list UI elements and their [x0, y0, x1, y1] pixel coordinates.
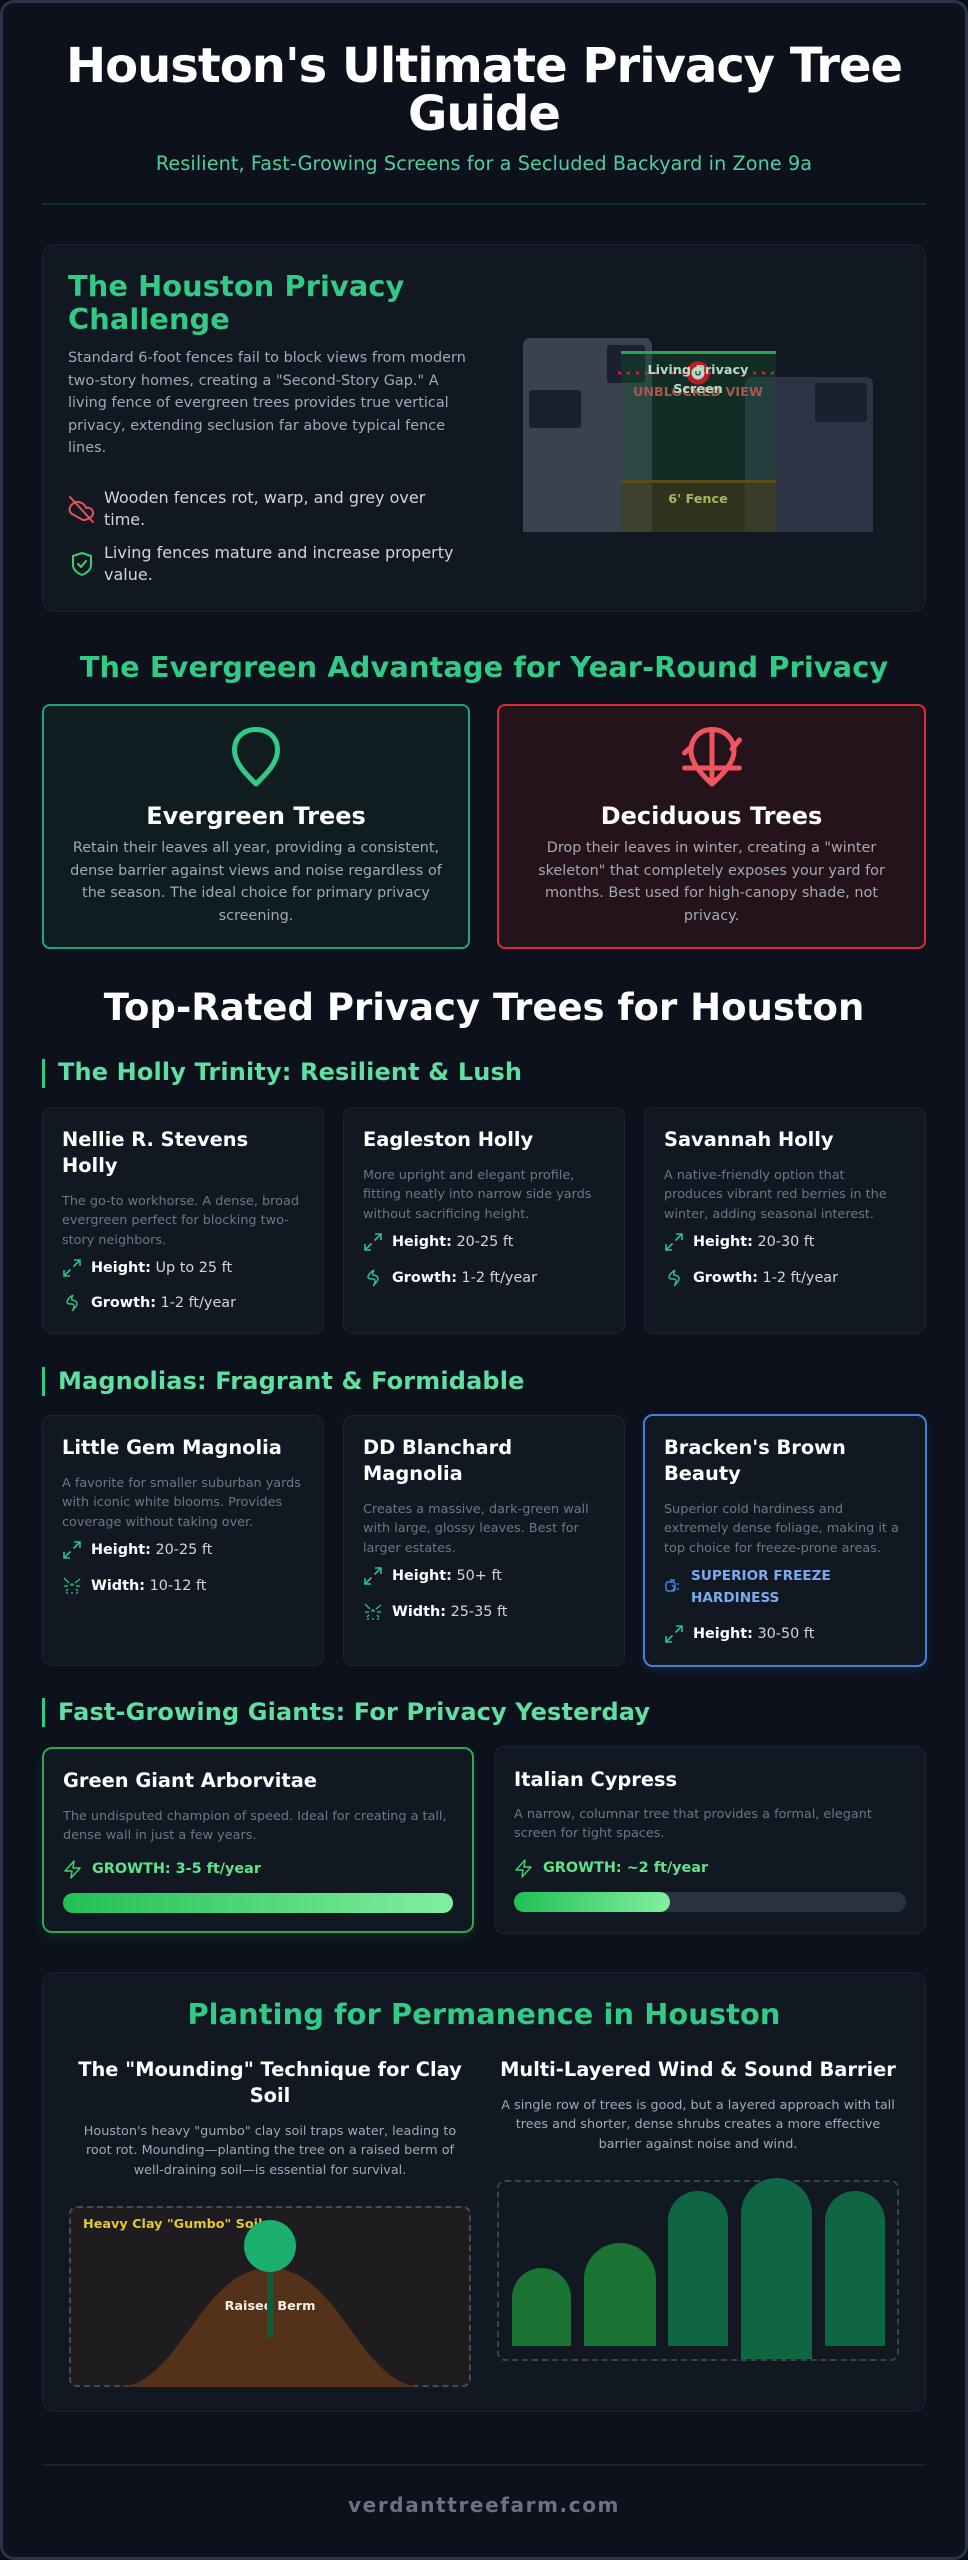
- icon: shield check: [72, 552, 92, 576]
- text block: challenge description: lines.: [68, 440, 106, 456]
- text block: deciduous description: privacy.: [684, 908, 739, 924]
- text block: challenge description: two-story homes, creating a "Second-Story Gap." A: [68, 372, 439, 388]
- heading: top-rated trees: Top-Rated Privacy Trees for Houston: [104, 986, 864, 1029]
- card: Italian Cypress: [494, 1746, 926, 1934]
- spec: width: Width: 25-35 ft: [392, 1604, 507, 1620]
- diagram: second-story gap: [523, 338, 873, 532]
- card title: Bracken's Brown: [664, 1436, 846, 1459]
- card description: fitting neatly into narrow side yards: [363, 1187, 591, 1202]
- card description: without sacrificing height.: [363, 1207, 529, 1222]
- card description: The undisputed champion of speed. Ideal for creating a tall,: [63, 1809, 447, 1824]
- text block: deciduous description: skeleton" that completely exposes your yard for: [538, 863, 885, 879]
- text block: challenge description: privacy, extending seclusion far above typical fence: [68, 418, 445, 434]
- card description: [664, 1168, 887, 1222]
- panel: deciduous trees: [497, 704, 926, 949]
- spec: growth: Growth: 1-2 ft/year: [392, 1270, 537, 1286]
- card title: Holly: [62, 1154, 117, 1177]
- unblocked view sight line: [618, 372, 776, 374]
- icon: eye target: [686, 361, 710, 385]
- card description: The go-to workhorse. A dense, broad: [62, 1194, 299, 1209]
- card description: Creates a massive, dark-green wall: [363, 1502, 589, 1517]
- card description: screen for tight spaces.: [514, 1826, 664, 1841]
- heading: multi-layered barrier: Multi-Layered Wind & Sound Barrier: [500, 2058, 896, 2081]
- section heading: fast-growing giants: Fast-Growing Giants: For Privacy Yesterday: [58, 1698, 650, 1726]
- card title: Magnolia: [363, 1462, 463, 1485]
- text block: evergreen description: [70, 840, 442, 924]
- card: Savannah Holly: [644, 1107, 926, 1334]
- card description: [63, 1809, 447, 1843]
- spec: height: Height: 20-25 ft: [392, 1234, 513, 1250]
- list item: wooden fences: Wooden fences rot, warp, and grey over: [104, 488, 425, 507]
- card description: [62, 1194, 299, 1248]
- growth rate: GROWTH: 3-5 ft/year: [92, 1861, 261, 1877]
- card: DD Blanchard Magnolia: [343, 1415, 625, 1666]
- spec: height: Height: 20-25 ft: [91, 1542, 212, 1558]
- heading: planting: Planting for Permanence in Houston: [187, 1997, 781, 2031]
- berm label: Raised Berm: [225, 2299, 315, 2314]
- card description: Superior cold hardiness and: [664, 1502, 843, 1517]
- heading: mounding technique: The "Mounding" Technique for Clay: [78, 2058, 462, 2081]
- text block: mounding description: [68, 2122, 472, 2180]
- soil label: Heavy Clay "Gumbo" Soil: [83, 2217, 262, 2232]
- card description: [363, 1502, 589, 1556]
- panel: evergreen trees: [42, 704, 470, 949]
- card description: top choice for freeze-prone areas.: [664, 1541, 881, 1556]
- icon: evergreen leaf: [232, 727, 280, 786]
- card description: A narrow, columnar tree that provides a formal, elegant: [514, 1807, 872, 1822]
- left house: [523, 338, 652, 532]
- card: Little Gem Magnolia: [42, 1415, 324, 1666]
- badge: superior freeze hardiness: [665, 1568, 831, 1606]
- card description: [514, 1807, 872, 1841]
- text block: mounding description: well-draining soil—is essential for survival.: [134, 2163, 406, 2178]
- text block: evergreen description: screening.: [219, 908, 293, 924]
- card description: [363, 1168, 591, 1222]
- card: Bracken's Brown Beauty: [643, 1414, 927, 1667]
- card title: DD Blanchard: [363, 1436, 512, 1459]
- card description: with large, glossy leaves. Best for: [363, 1521, 579, 1536]
- text block: deciduous description: months. Best used for high-canopy shade, not: [545, 885, 878, 901]
- spec: growth: Growth: 1-2 ft/year: [693, 1270, 838, 1286]
- card description: evergreen perfect for blocking two-: [62, 1213, 289, 1228]
- card: Eagleston Holly: [343, 1107, 625, 1334]
- card description: extremely dense foliage, making it a: [664, 1521, 899, 1536]
- card description: story neighbors.: [62, 1233, 166, 1248]
- text block: evergreen description: dense barrier against views and noise regardless of: [70, 863, 442, 879]
- spec: growth: Growth: 1-2 ft/year: [91, 1295, 236, 1311]
- text block: barrier description: barrier against noise and wind.: [599, 2137, 797, 2152]
- subtitle: Resilient, Fast-Growing Screens for a Secluded Backyard in Zone 9a: [156, 152, 812, 175]
- title: [66, 38, 902, 142]
- growth bar: [514, 1892, 906, 1912]
- card description: winter, adding seasonal interest.: [664, 1207, 874, 1222]
- title: Guide: [408, 86, 560, 142]
- text block: evergreen description: Retain their leaves all year, providing a consistent,: [73, 840, 439, 856]
- text block: deciduous description: Drop their leaves in winter, creating a "winter: [547, 840, 876, 856]
- card description: with iconic white blooms. Provides: [62, 1495, 282, 1510]
- text block: challenge description: [68, 350, 466, 456]
- card description: larger estates.: [363, 1541, 456, 1556]
- growth rate: GROWTH: ~2 ft/year: [543, 1860, 708, 1876]
- living privacy screen: [621, 351, 776, 480]
- heading: challenge: [68, 269, 404, 336]
- list item: wooden fences: [104, 488, 426, 529]
- card description: [664, 1502, 899, 1556]
- heading: deciduous trees: Deciduous Trees: [601, 802, 822, 830]
- card title: [62, 1128, 248, 1177]
- card description: coverage without taking over.: [62, 1515, 253, 1530]
- tall tree 1: [668, 2191, 728, 2346]
- card description: dense wall in just a few years.: [63, 1828, 256, 1843]
- growth bar: [63, 1893, 453, 1913]
- text block: barrier description: trees and shorter, dense shrubs creates a more effective: [516, 2117, 880, 2132]
- title: Houston's Ultimate Privacy Tree: [66, 38, 902, 94]
- text block: challenge description: Standard 6-foot fences fail to block views from modern: [68, 350, 466, 366]
- card title: Eagleston Holly: [363, 1128, 533, 1151]
- panel: the Houston privacy challenge: [42, 244, 926, 612]
- icon: deciduous leaf skeleton: [682, 727, 742, 787]
- card title: [664, 1436, 846, 1485]
- text block: barrier description: A single row of trees is good, but a layered approach with tall: [501, 2098, 895, 2113]
- card description: [62, 1476, 301, 1530]
- label: living privacy screen: Screen: [673, 382, 723, 397]
- text block: barrier description: [497, 2096, 899, 2154]
- six foot fence: [621, 480, 776, 532]
- heading: challenge: The Houston Privacy: [68, 269, 404, 303]
- text block: deciduous description: [538, 840, 885, 924]
- card title: Italian Cypress: [514, 1768, 677, 1791]
- label: unblocked view: UNBLOCKED VIEW: [633, 385, 763, 400]
- shrub small: [512, 2268, 571, 2346]
- spec: height: Height: 50+ ft: [392, 1568, 502, 1584]
- footer: website: verdanttreefarm.com: [348, 2493, 620, 2517]
- list item: wooden fences: time.: [104, 510, 145, 529]
- list item: living fences: Living fences mature and increase property: [104, 543, 454, 562]
- heading: evergreen advantage: The Evergreen Advantage for Year-Round Privacy: [80, 650, 888, 684]
- heading: challenge: Challenge: [68, 302, 230, 336]
- diagram: layered barrier: [497, 2180, 899, 2361]
- card title: Green Giant Arborvitae: [63, 1769, 317, 1792]
- card description: produces vibrant red berries in the: [664, 1187, 887, 1202]
- tallest tree: [741, 2178, 812, 2359]
- card: Green Giant Arborvitae: [42, 1747, 474, 1933]
- list item: living fences: [104, 543, 454, 584]
- diagram: mounding technique: [69, 2206, 471, 2387]
- badge: superior freeze hardiness: SUPERIOR FREEZE: [691, 1568, 831, 1584]
- spec: height: Height: Up to 25 ft: [91, 1260, 232, 1276]
- shrub large: [584, 2243, 656, 2346]
- card title: Beauty: [664, 1462, 741, 1485]
- spec: height: Height: 20-30 ft: [693, 1234, 814, 1250]
- heading: mounding technique: Soil: [250, 2084, 290, 2107]
- card description: A native-friendly option that: [664, 1168, 845, 1183]
- heading: evergreen trees: Evergreen Trees: [146, 802, 366, 830]
- heading: mounding technique: [68, 2057, 472, 2109]
- tall tree 2: [825, 2191, 885, 2346]
- text block: evergreen description: the season. The ideal choice for primary privacy: [82, 885, 430, 901]
- card title: Little Gem Magnolia: [62, 1436, 282, 1459]
- section heading: holly trinity: The Holly Trinity: Resilient & Lush: [58, 1058, 522, 1086]
- icon: crossed-out leaf: [68, 496, 94, 523]
- card description: A favorite for smaller suburban yards: [62, 1476, 301, 1491]
- card description: More upright and elegant profile,: [363, 1168, 574, 1183]
- list item: living fences: value.: [104, 565, 153, 584]
- text block: mounding description: root rot. Mounding—planting the tree on a raised berm of: [86, 2143, 454, 2158]
- badge: superior freeze hardiness: HARDINESS: [691, 1590, 779, 1606]
- text block: mounding description: Houston's heavy "gumbo" clay soil traps water, leading to: [84, 2124, 456, 2139]
- card: Nellie R. Stevens Holly: [42, 1107, 324, 1334]
- panel: planting for permanence: [42, 1972, 926, 2412]
- spec: height: Height: 30-50 ft: [693, 1626, 814, 1642]
- raised berm: [117, 2268, 423, 2387]
- card title: Savannah Holly: [664, 1128, 834, 1151]
- tree: [244, 2220, 296, 2338]
- card title: Nellie R. Stevens: [62, 1128, 248, 1151]
- section heading: magnolias: Magnolias: Fragrant & Formidable: [58, 1367, 525, 1395]
- label: living privacy screen: Living Privacy: [648, 363, 748, 378]
- spec: width: Width: 10-12 ft: [91, 1578, 206, 1594]
- right house: [745, 377, 873, 532]
- text block: challenge description: living fence of evergreen trees provides true vertical: [68, 395, 449, 411]
- card title: [363, 1436, 512, 1485]
- six foot fence: 6' Fence: [668, 492, 728, 507]
